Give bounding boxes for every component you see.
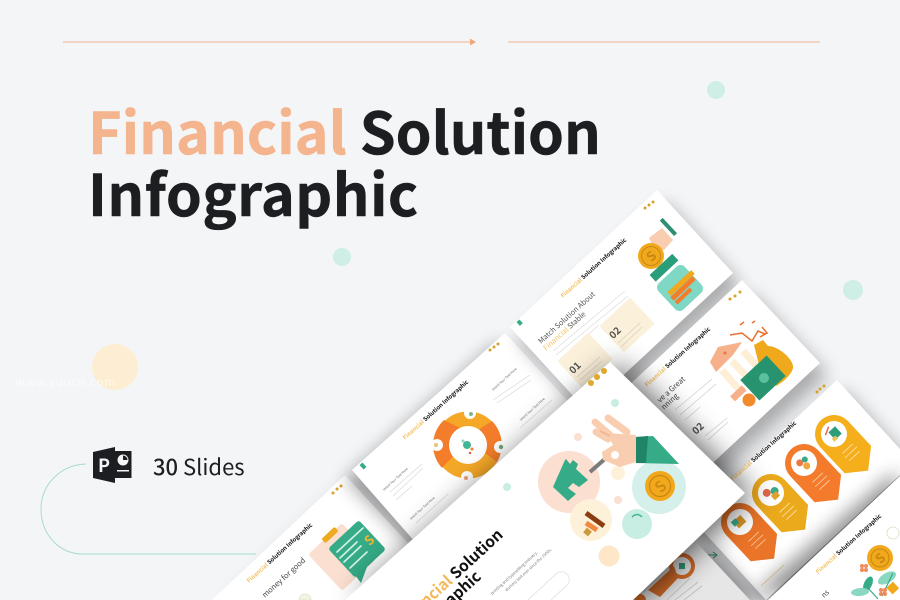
icon: logo — [516, 319, 523, 326]
icon: small badge — [299, 594, 311, 600]
decorative circle: mint center — [333, 248, 351, 266]
ring nodes — [431, 407, 506, 483]
icon: coin and plant: S — [870, 548, 889, 567]
icon: PowerPoint — [93, 447, 132, 483]
slide: ring diagram — [352, 333, 590, 567]
text lines — [675, 379, 728, 440]
slide count: 30 Slides — [153, 450, 245, 482]
icon: chat document: S — [359, 530, 378, 549]
text blocks: Insert Your Text Here — [518, 396, 546, 422]
text blocks: Insert Your Text Here — [490, 366, 518, 392]
icon: logo — [359, 462, 367, 470]
icon: PowerPoint: P — [98, 452, 110, 478]
cover button — [528, 572, 569, 600]
arrow — [705, 552, 717, 558]
slide: jar and coin — [510, 190, 733, 410]
icon: key — [590, 458, 606, 472]
slide heading: Financial Solution Infographic — [558, 235, 628, 299]
cover body: printing and typesetting industry. — [489, 550, 539, 597]
card 02 — [599, 298, 655, 352]
decorative circle: cream — [92, 344, 138, 390]
cover dots — [588, 368, 607, 386]
cover body: dummy text ever since the 1500s. — [504, 547, 553, 593]
slide: money chat — [212, 475, 420, 600]
slide heading: Financial Solution Infographic — [400, 377, 470, 441]
slide dots — [728, 290, 742, 300]
tab 4 — [807, 407, 882, 484]
card 01: 01 — [565, 357, 584, 377]
slide dots — [332, 484, 342, 494]
icon: coin, hand and jar: S — [641, 246, 660, 265]
card 02: 02 — [605, 322, 624, 342]
tab 1 — [713, 495, 788, 572]
tab 2 — [744, 466, 819, 543]
title line two: Infographic — [88, 149, 419, 233]
slide: four step tabs — [690, 380, 900, 600]
top arrow line — [63, 38, 476, 46]
text blocks: Insert Your Text Here — [408, 495, 436, 521]
text lines — [390, 375, 552, 523]
slide: orange card — [634, 543, 750, 600]
card 01 — [557, 333, 613, 387]
slide: main cover — [345, 362, 745, 600]
tab 3 — [777, 436, 852, 513]
slide: plant growth — [768, 476, 900, 600]
slide dots — [488, 342, 500, 352]
slide heading: Financial Solution Infographic — [642, 324, 712, 388]
icon: dollar coin: S — [650, 476, 671, 497]
slide heading: Financial Solution Infographic — [813, 511, 883, 575]
slide footer line — [761, 565, 784, 586]
slide heading: Financial Solution Infographic — [728, 418, 798, 482]
card header — [634, 553, 695, 600]
icon: coin, hand and jar — [638, 218, 705, 313]
text lines — [553, 291, 628, 359]
slide dots — [816, 384, 826, 394]
text blocks: Insert Your Text Here — [381, 466, 409, 492]
icon: hand and sleeve — [595, 418, 679, 467]
icon: chat document — [308, 520, 386, 591]
top right line — [508, 41, 820, 43]
illustration bubbles — [503, 399, 686, 566]
ring chart — [431, 407, 506, 483]
icon: dollar coin — [645, 471, 675, 501]
connector curve — [41, 464, 256, 554]
icon: bar chart — [585, 513, 604, 534]
icon: logo — [368, 579, 377, 588]
slide subheading: ve a Great — [655, 374, 688, 405]
icon: bank, bag, arrow — [710, 321, 793, 406]
decorative circle: mint top right — [707, 81, 725, 99]
icon: house — [553, 459, 588, 501]
slide subheading: Match Solution About — [536, 289, 598, 346]
slide: bank and money bag — [595, 280, 820, 500]
text lines — [667, 578, 702, 600]
slide dots — [644, 200, 654, 210]
slide heading: Financial Solution Infographic — [244, 520, 314, 584]
watermark: www.yuucn.com — [15, 373, 116, 390]
decorative circle: mint right — [843, 280, 863, 300]
slide text: money for good — [260, 555, 308, 600]
slide subheading: Financial Stable — [541, 310, 588, 353]
title line one: Financial Solution — [88, 87, 601, 171]
text blocks — [381, 366, 546, 521]
slide subheading: nning — [659, 390, 681, 412]
icon: badge — [887, 527, 899, 539]
number 02: 02 — [688, 418, 707, 437]
slide text: ns — [819, 587, 832, 600]
